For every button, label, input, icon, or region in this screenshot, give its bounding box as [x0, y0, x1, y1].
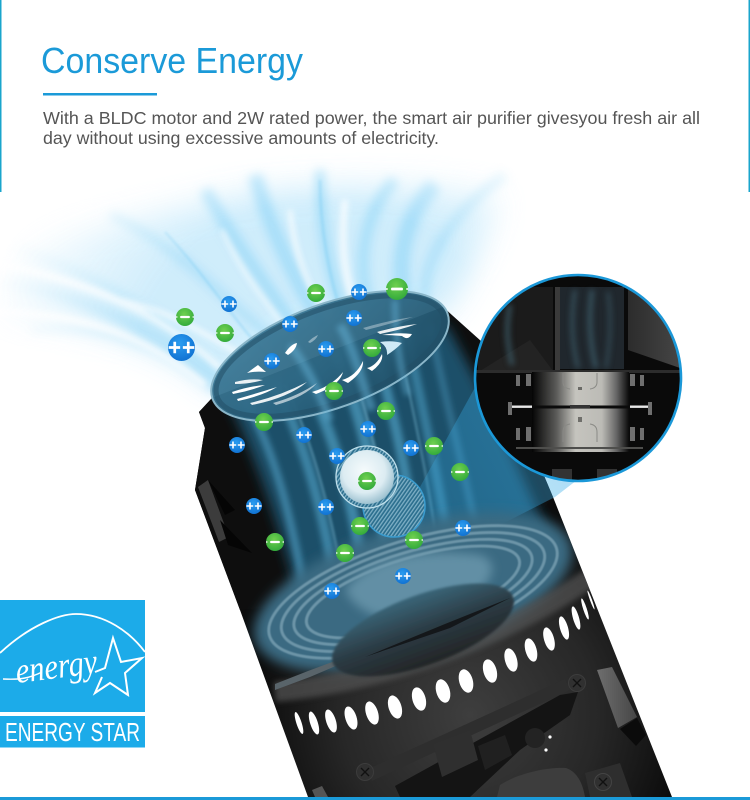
vent slots: [293, 590, 595, 736]
description text: [43, 108, 700, 148]
bottom line: [0, 797, 750, 800]
logo arc: [0, 614, 145, 653]
logo star: [95, 638, 142, 695]
side connector: [198, 480, 252, 553]
right bracket: [597, 667, 637, 728]
logo wordmark: ENERGY STAR: [5, 717, 140, 747]
top vent ring: [195, 264, 465, 448]
air flow wisps: [0, 170, 505, 395]
frame lines: [0, 0, 750, 192]
description text: day without using excessive amounts of electricity.: [43, 128, 439, 148]
callout beam: [392, 382, 590, 566]
energy star logo: [0, 600, 145, 748]
lower box: [497, 768, 585, 797]
vent slits: [232, 317, 417, 405]
internal air flow: [226, 321, 549, 584]
description text: With a BLDC motor and 2W rated power, the smart air purifier givesyou fresh air all: [43, 108, 700, 128]
particles: positive ions: [168, 284, 471, 599]
screws: [356, 764, 374, 780]
bottom fan disc: [246, 510, 590, 704]
title: Conserve Energy: [41, 40, 303, 81]
center lens filter: [336, 446, 425, 537]
title underline: [43, 93, 157, 96]
left bracket: [312, 786, 328, 797]
logo script: energy: [13, 641, 99, 691]
zoom inset: motor close-up: [470, 270, 690, 490]
fan hub: [330, 549, 516, 678]
flow through ring: [290, 300, 408, 420]
purifier body: [195, 307, 672, 797]
motor mount bar and hardware: [312, 667, 646, 797]
particles: negative ions: [176, 278, 469, 562]
